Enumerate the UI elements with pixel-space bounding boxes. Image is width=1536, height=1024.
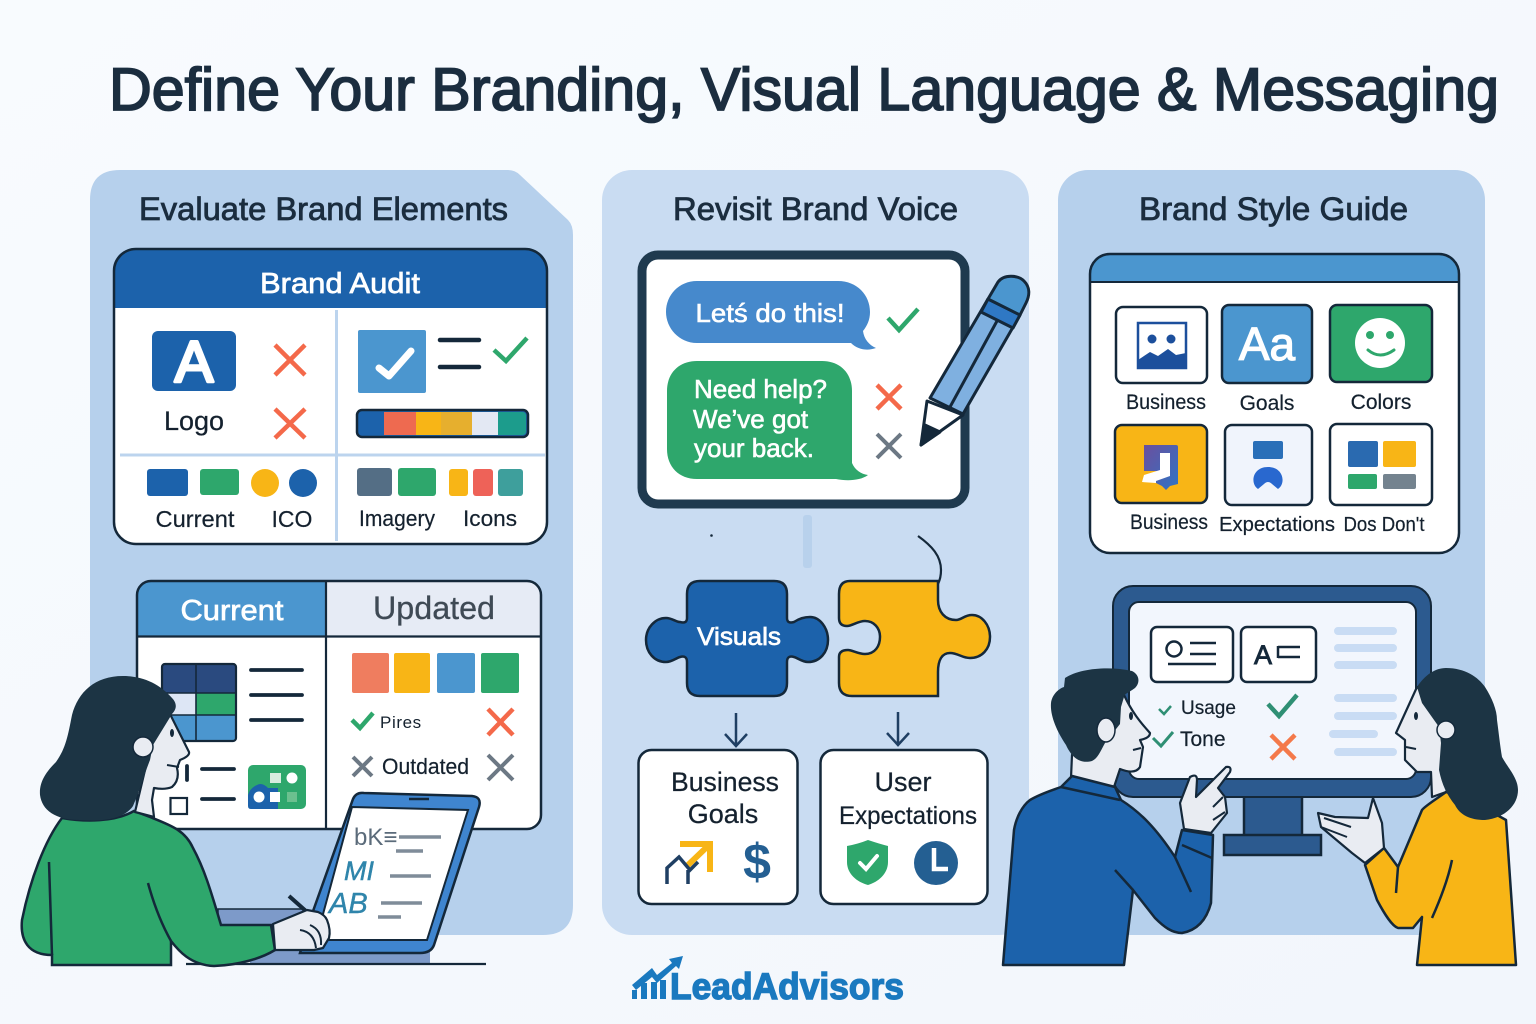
jacket lines (1061, 787, 1212, 892)
puzzle piece: visuals: Visuals (697, 623, 781, 651)
label: ICO: ICO (272, 506, 312, 532)
pointing hand (1180, 767, 1230, 833)
illustration: man pointing (1003, 668, 1230, 965)
ear and eye (1406, 712, 1455, 749)
current label: Current (180, 595, 284, 627)
tile: colours smile (1330, 305, 1432, 382)
icon: grey cross (353, 757, 372, 776)
card: brand audit (114, 249, 547, 544)
label: imagery: Imagery (359, 506, 435, 531)
hair (1051, 668, 1138, 762)
icon: check (888, 309, 918, 330)
table icon (162, 664, 236, 741)
panel: brand style guide (1058, 170, 1485, 935)
arrow: puzzle to user expectations (887, 712, 909, 745)
heading: evaluate brand elements: Evaluate Brand Elements (139, 191, 508, 227)
illustration: woman gesturing (1318, 668, 1518, 965)
keyboard base (186, 909, 486, 964)
swatches: current (147, 469, 317, 497)
label: pires: Pires (380, 713, 422, 732)
tile: dos and don'ts (1330, 424, 1432, 505)
heading: brand style guide: Brand Style Guide (1139, 191, 1408, 227)
arrow: visuals to business goals (725, 713, 747, 746)
icon: red crosses (275, 345, 305, 438)
blue jacket (1003, 776, 1213, 965)
yellow top (1365, 792, 1516, 965)
logo wordmark: LeadAdvisors (670, 966, 904, 1007)
brand audit title: Brand Audit (260, 268, 420, 300)
icon: green check (494, 338, 527, 361)
icon: clock (914, 841, 958, 885)
light text lines (1333, 631, 1393, 752)
eye and mouth (167, 729, 179, 767)
icon: dollar: $ (743, 834, 771, 890)
card: style guide (1090, 254, 1459, 553)
icon: red cross (488, 709, 513, 735)
icon: green component tile (248, 765, 306, 809)
text lines (440, 340, 479, 367)
card: business goals: Goals (688, 799, 758, 829)
hand and pen (273, 896, 330, 950)
label: icons: Icons (463, 506, 517, 531)
tablet (642, 255, 1029, 504)
colour bar (357, 410, 528, 437)
icon: check (1153, 732, 1173, 746)
card: current vs updated (137, 581, 541, 829)
card: user expectations: User (874, 767, 932, 797)
logo mark (632, 956, 683, 999)
laptop text: bK≡ (354, 824, 397, 851)
icon: check (352, 713, 373, 728)
ear and eye (1097, 712, 1141, 750)
label: dos don't: Dos Don't (1344, 514, 1425, 536)
title: Define Your Branding, Visual Language & Messaging (109, 56, 1499, 123)
icon: logo A: A (175, 330, 214, 395)
card: business goals (638, 750, 798, 904)
icon: grey cross (488, 755, 513, 780)
label: expectations: Expectations (1219, 514, 1335, 536)
laptop (300, 793, 480, 953)
puzzle piece: yellow (839, 536, 990, 696)
monitor card: type: A (1254, 640, 1272, 670)
neck and face (1071, 695, 1150, 787)
monitor card: type (1241, 627, 1316, 682)
icon: grey cross (877, 434, 901, 458)
open hand (1318, 798, 1384, 863)
label: logo: Logo (164, 406, 224, 436)
face and neck (1396, 687, 1460, 797)
panel: revisit brand voice (602, 170, 1029, 935)
sleeve lines (1396, 860, 1452, 918)
monitor stand (1224, 795, 1321, 855)
label: business: Business (1126, 391, 1206, 414)
laptop: AB (327, 888, 368, 920)
updated label: Updated (373, 590, 495, 626)
icon: red cross (877, 385, 901, 409)
card: business goals: Business (671, 767, 779, 797)
tile: type: Aa (1239, 318, 1296, 370)
speech bubble: let's do this: Letś do this! (696, 298, 844, 328)
card: user expectations: Expectations (839, 802, 977, 830)
icon: shield (847, 840, 888, 885)
colour squares (352, 653, 519, 693)
panel: evaluate brand elements (90, 170, 573, 935)
label: usage: Usage (1181, 698, 1236, 719)
label: outdated: Outdated (382, 754, 469, 779)
monitor card: profile (1151, 627, 1233, 682)
tile: type (1222, 305, 1312, 383)
laptop: MI (344, 856, 374, 886)
icon: small check (1159, 706, 1171, 714)
icon: logo A (152, 330, 236, 395)
logo: LeadAdvisors (632, 956, 904, 1007)
speech bubble: need help: We’ve got (693, 404, 809, 434)
label: current: Current (156, 506, 235, 532)
speech bubble: need help (667, 361, 868, 480)
tile: expectations (1225, 425, 1312, 505)
icon: orange cross (1271, 735, 1295, 759)
face (135, 714, 189, 817)
label: colors: Colors (1351, 391, 1411, 414)
icon: growth arrow (667, 844, 710, 884)
illustration: woman with laptop (22, 676, 486, 966)
swatches: imagery and icons (357, 468, 523, 496)
heading: revisit brand voice: Revisit Brand Voice (673, 191, 958, 227)
label: tone: Tone (1180, 728, 1226, 751)
sleeve lines (49, 862, 171, 955)
tile: yellow chat (1115, 425, 1207, 503)
brand audit header (114, 249, 547, 308)
hair (40, 676, 176, 820)
puzzle piece: visuals (646, 581, 828, 696)
checkbox (170, 798, 187, 814)
hair (1417, 668, 1518, 820)
icon: pencil (921, 276, 1029, 445)
tile: business image (1116, 307, 1207, 383)
icon: large check (1268, 695, 1297, 716)
label: business: Business (1130, 511, 1208, 534)
card: user expectations (820, 750, 988, 904)
label: goals: Goals (1240, 392, 1294, 415)
body (22, 811, 275, 966)
speech bubble: need help: your back. (694, 433, 814, 463)
current tab (137, 581, 326, 636)
text lines (187, 670, 302, 799)
monitor (1113, 586, 1431, 855)
updated tab (326, 581, 541, 636)
speech bubble: let's do this (666, 281, 876, 350)
dot and faint connector (710, 515, 812, 568)
speech bubble: need help: Need help? (694, 374, 827, 404)
icon: check tile (358, 330, 426, 393)
ear (133, 737, 153, 757)
